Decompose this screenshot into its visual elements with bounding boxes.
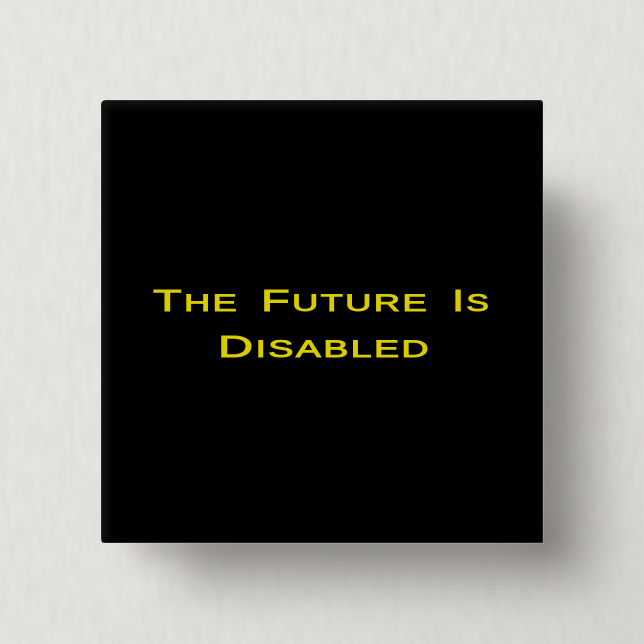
slogan line 1 [153, 283, 491, 318]
black button face [101, 100, 543, 543]
slogan line 2: D ISABLED [218, 329, 431, 364]
button drop shadow [135, 190, 595, 585]
slogan line 1: IS [452, 283, 491, 318]
slogan line 1: T HE [153, 283, 239, 318]
square button infographic [101, 100, 644, 644]
slogan line 1: F UTURE [261, 283, 429, 318]
slogan text [153, 283, 491, 364]
